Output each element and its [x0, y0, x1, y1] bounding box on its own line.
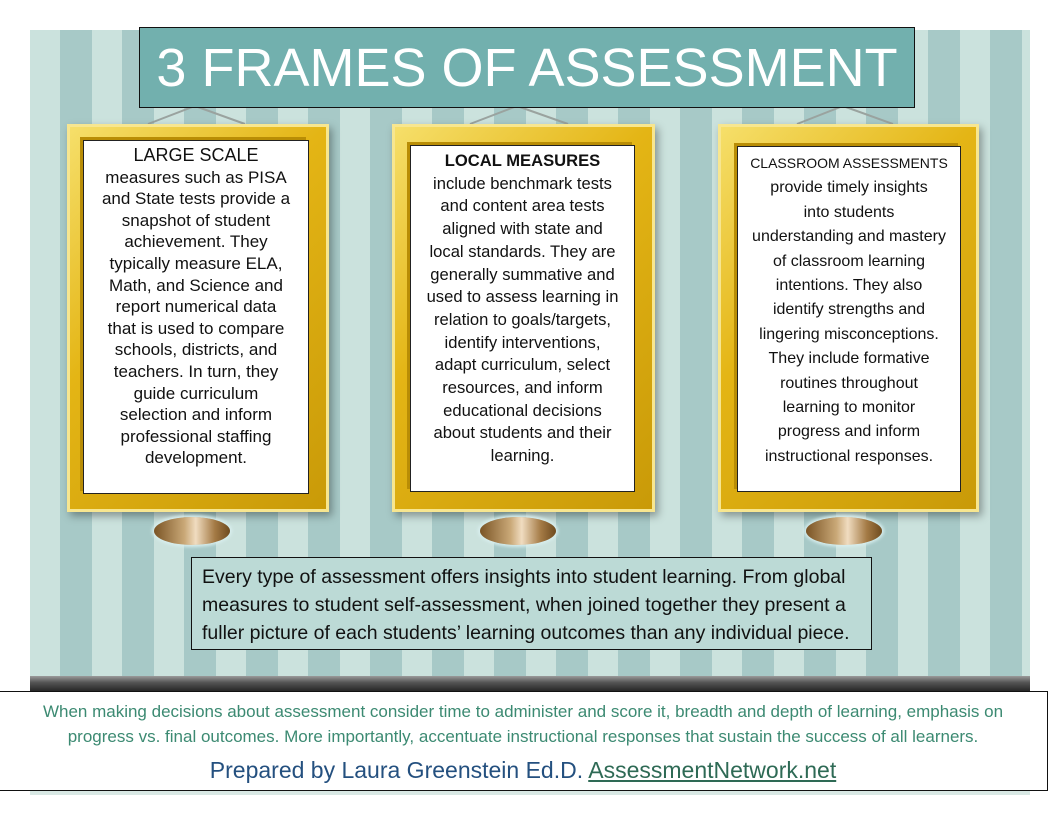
wall background: [30, 30, 1030, 678]
text: local measures: resources, and inform: [442, 378, 603, 397]
panel: local measures: [392, 124, 655, 512]
text: large scale: and State tests provide a: [102, 189, 290, 208]
text: large scale: schools, districts, and: [115, 340, 277, 359]
panel: classroom assessments: [718, 124, 979, 512]
text: large scale: that is used to compare: [108, 319, 284, 338]
text: local measures: and content area tests: [440, 196, 605, 215]
text: large scale: LARGE SCALE: [133, 145, 259, 165]
footer note: [43, 702, 1003, 746]
text: large scale: teachers. In turn, they: [114, 362, 278, 381]
text: large scale: snapshot of student: [122, 211, 270, 230]
text: classroom assessments: instructional responses.: [765, 448, 933, 465]
text: classroom assessments: understanding and mastery: [752, 228, 946, 245]
summary callout: Every type of assessment offers insights into student learning. From global: [202, 566, 845, 588]
text: local measures: about students and their: [433, 423, 612, 442]
text: classroom assessments: CLASSROOM ASSESSMENTS: [750, 155, 948, 171]
text: local measures: learning.: [491, 446, 554, 465]
text: classroom assessments: progress and inform: [778, 423, 920, 440]
plaque 1: [154, 517, 230, 545]
text: large scale: report numerical data: [116, 297, 276, 316]
summary callout: fuller picture of each students’ learning outcomes than any individual piece.: [202, 622, 850, 644]
text: classroom assessments: routines throughout: [780, 375, 918, 392]
credit: Prepared by Laura Greenstein Ed.D. AssessmentNetwork.net: [210, 757, 836, 783]
footer note: When making decisions about assessment consider time to administer and score it, breadth and depth of learning, emphasis on: [43, 702, 1003, 721]
text: local measures: educational decisions: [443, 401, 602, 420]
text: local measures: identify interventions,: [445, 333, 600, 352]
text: large scale: Math, and Science and: [109, 276, 283, 295]
text: classroom assessments: of classroom learning: [773, 253, 925, 270]
text: large scale: [83, 140, 309, 494]
text: local measures: LOCAL MEASURES: [445, 151, 600, 170]
text: classroom assessments: into students: [804, 204, 894, 221]
plaque 3: [806, 517, 882, 545]
text: local measures: generally summative and: [430, 265, 615, 284]
text: classroom assessments: learning to monitor: [783, 399, 915, 416]
text: local measures: aligned with state and: [442, 219, 603, 238]
text: local measures: adapt curriculum, select: [435, 355, 610, 374]
text: classroom assessments: lingering misconceptions.: [759, 326, 939, 343]
panel: large scale: [67, 124, 329, 512]
text: large scale: typically measure ELA,: [110, 254, 282, 273]
text: large scale: development.: [145, 448, 247, 467]
summary callout: measures to student self-assessment, when joined together they present a: [202, 594, 846, 616]
text: large scale: professional staffing: [121, 427, 271, 446]
floor bar: [30, 676, 1030, 692]
text: local measures: used to assess learning in: [427, 287, 618, 306]
summary callout: [191, 557, 872, 650]
title: 3 FRAMES OF ASSESSMENT: [156, 38, 898, 98]
text: classroom assessments: They include formative: [769, 350, 929, 367]
hanging wires: [148, 108, 894, 124]
text: local measures: [410, 145, 635, 492]
text: classroom assessments: intentions. They also: [776, 277, 922, 294]
text: large scale: measures such as PISA: [105, 168, 287, 187]
text: classroom assessments: [737, 146, 961, 492]
text: large scale: guide curriculum: [134, 384, 258, 403]
footer box: [0, 691, 1048, 791]
text: classroom assessments: provide timely insights: [770, 179, 928, 196]
text: classroom assessments: identify strengths and: [773, 301, 925, 318]
footer note: progress vs. final outcomes. More importantly, accentuate instructional responses that sustain the success of all learners.: [68, 727, 978, 746]
text: local measures: relation to goals/targets,: [434, 310, 611, 329]
text: large scale: selection and inform: [120, 405, 272, 424]
text: local measures: local standards. They are: [429, 242, 616, 261]
text: local measures: include benchmark tests: [433, 174, 612, 193]
plaque 2: [480, 517, 556, 545]
text: large scale: achievement. They: [124, 232, 268, 251]
